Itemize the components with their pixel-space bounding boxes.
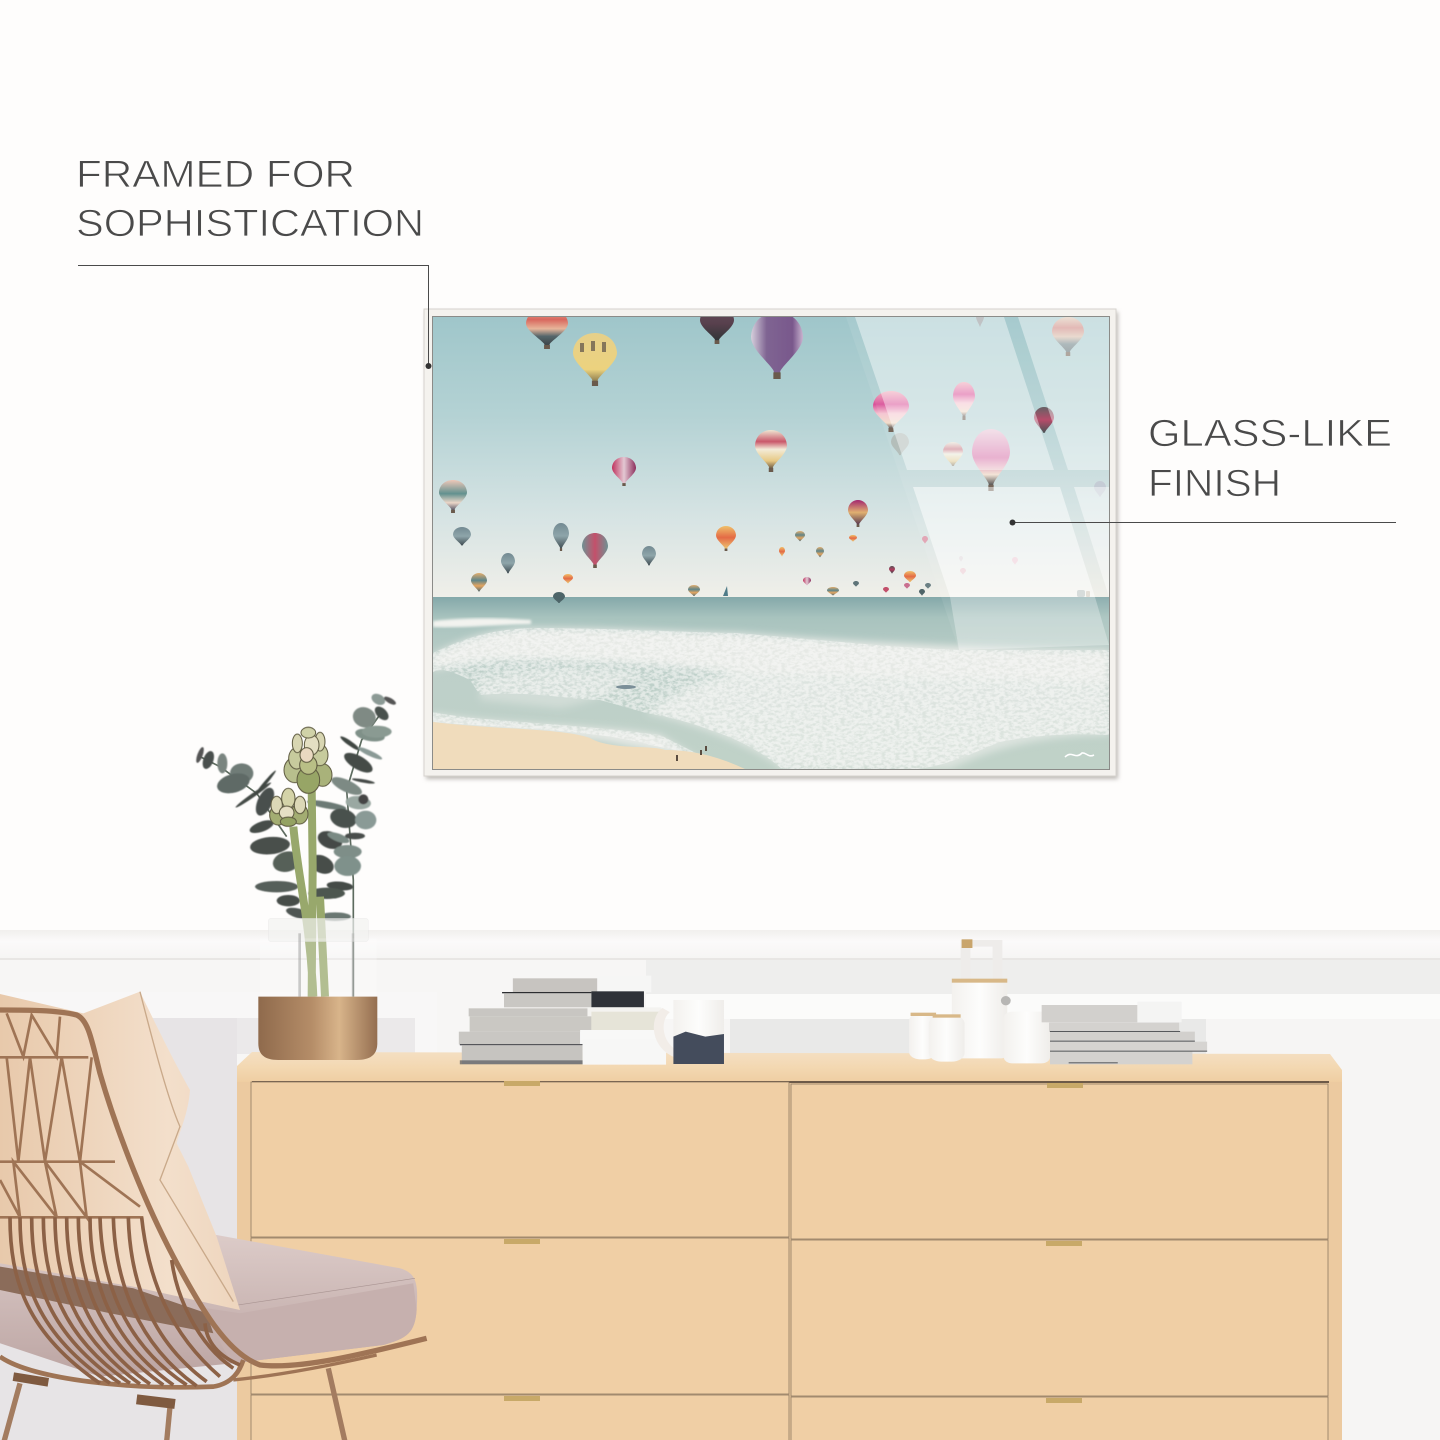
dresser top (237, 1052, 1342, 1083)
mug (659, 1000, 724, 1064)
magazine stack (1042, 1002, 1207, 1064)
chair frame wires (0, 1010, 427, 1387)
seat cushion (0, 1235, 417, 1377)
copper pot (258, 997, 377, 1060)
chair legs and brackets (4, 1368, 345, 1440)
lit seat front (207, 1283, 417, 1363)
teapot (952, 939, 1011, 1058)
sea (433, 597, 1109, 769)
book stack (459, 976, 666, 1065)
callout: framed for sophistication (76, 154, 432, 369)
eucalyptus stem (200, 710, 383, 997)
artichoke buds (270, 727, 332, 826)
wainscot panelling (0, 930, 1440, 1440)
artichoke stems (293, 787, 325, 997)
cushion shade under pillow (0, 1267, 213, 1333)
callout: glass-like finish (1010, 413, 1396, 526)
lounge chair (0, 992, 427, 1440)
back pillow (0, 992, 240, 1310)
cushion seam (238, 1278, 415, 1305)
glass reflection of a window (846, 317, 1109, 650)
heading: framed for sophistication: SOPHISTICATION (76, 203, 424, 245)
heading: framed for sophistication: FRAMED FOR (76, 154, 355, 196)
heading: glass-like finish: GLASS-LIKE (1148, 413, 1392, 455)
sky (433, 317, 1109, 598)
leader line to frame (78, 266, 432, 369)
objects on dresser (459, 939, 1207, 1065)
glass vase (260, 918, 377, 998)
dresser body (237, 1075, 1342, 1440)
heading: glass-like finish: FINISH (1148, 463, 1281, 505)
pillow seam (140, 992, 233, 1302)
drawer fronts (251, 1082, 1328, 1440)
drawer handles (504, 1081, 1083, 1403)
small cups (909, 1012, 1050, 1063)
people on the beach (676, 746, 707, 761)
photo: balloons over the sea (433, 306, 1109, 769)
balloons (439, 306, 1106, 603)
plant in copper vase (195, 691, 397, 1060)
wire back pattern (0, 1013, 143, 1217)
sand (433, 722, 745, 769)
heading: glass-like finish (1148, 413, 1392, 505)
wire seat ribs (10, 1217, 240, 1386)
frame (424, 309, 1118, 779)
heading: framed for sophistication (76, 154, 424, 245)
foam texture (433, 625, 1109, 769)
signature (1065, 753, 1094, 757)
framed picture (424, 306, 1118, 779)
leader line to glass (1010, 520, 1396, 526)
eucalyptus leaves (195, 691, 397, 921)
dresser (237, 1052, 1342, 1440)
